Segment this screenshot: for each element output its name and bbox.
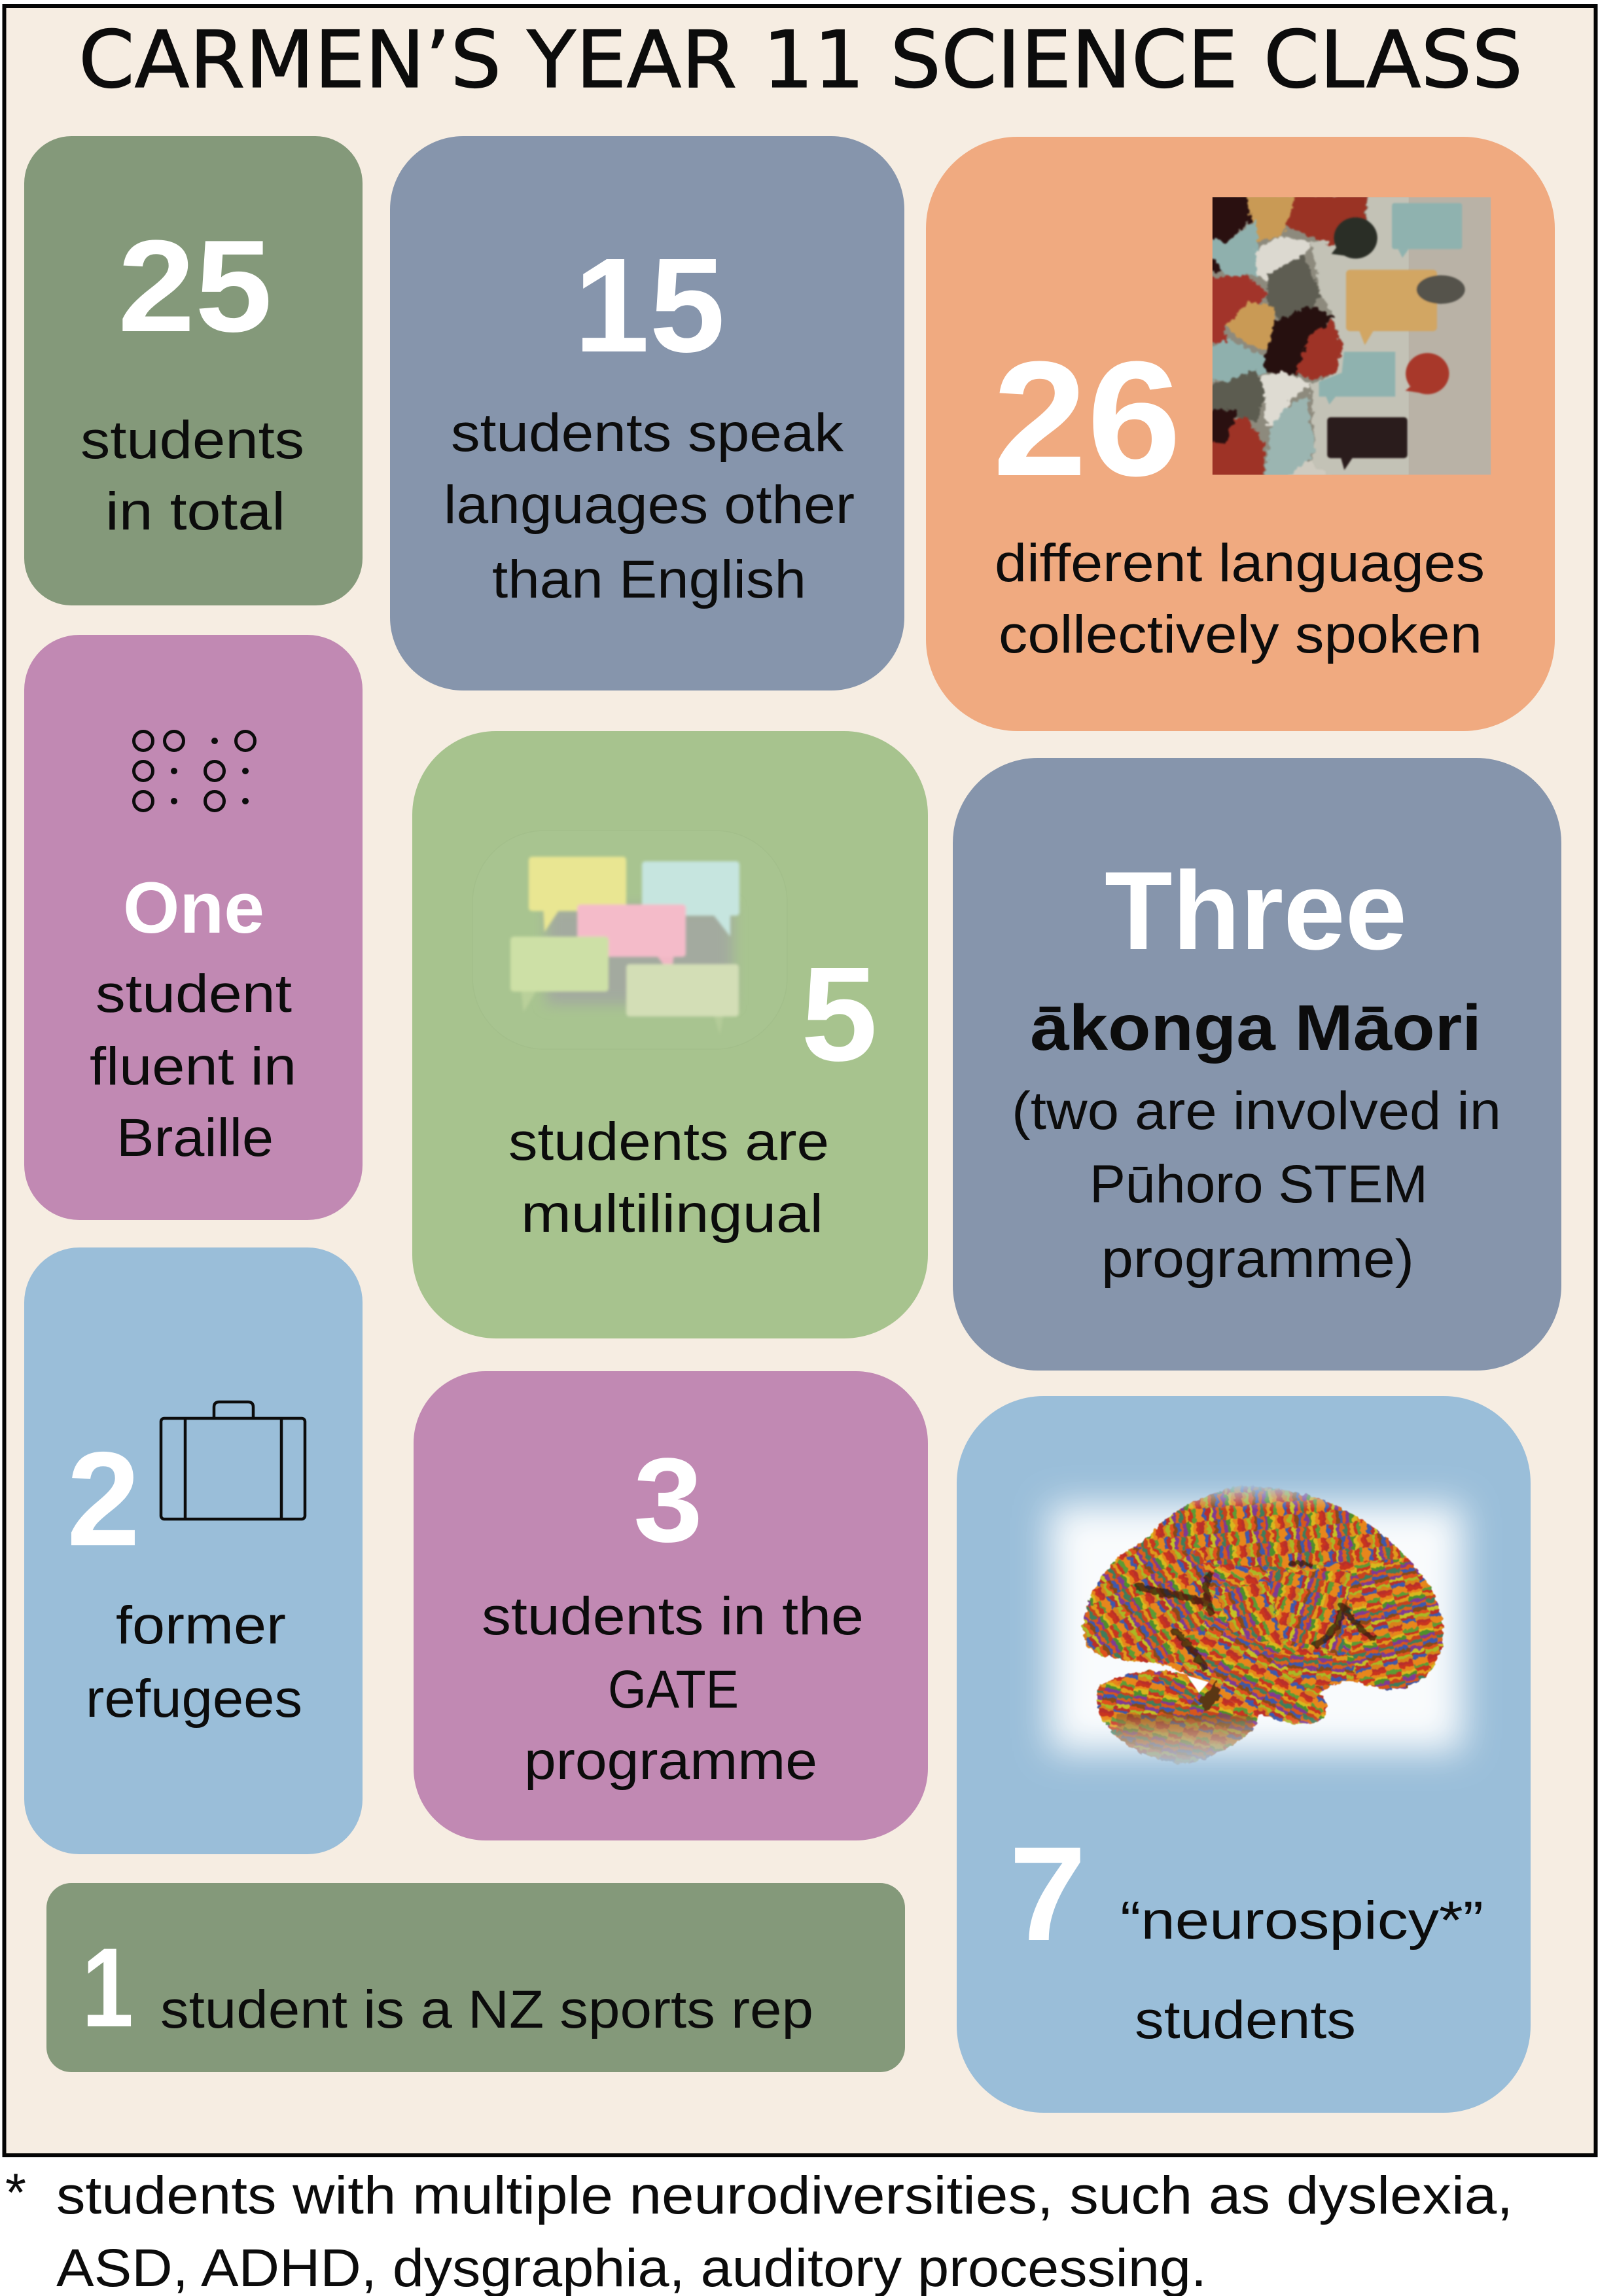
footnote: students with multiple neurodiversities, such as dyslexia, (56, 2166, 1513, 2225)
panel: 5 multilingual students (412, 731, 928, 1338)
panel: 1 student is a NZ sports rep (46, 1883, 905, 2072)
text: different languages collectively spoken: different languages (995, 533, 1485, 593)
text: students are multilingual (508, 1112, 829, 1244)
text: students in the GATE programme: programme (524, 1731, 817, 1791)
text: different languages collectively spoken (995, 533, 1485, 664)
panel: 7 neurospicy students (957, 1396, 1531, 2113)
text: students are multilingual: multilingual (521, 1184, 823, 1244)
footnote (5, 2163, 1513, 2296)
text: students in the GATE programme: students in the (482, 1587, 864, 1646)
number 5: 5 (801, 939, 878, 1089)
number 2: 2 (67, 1424, 140, 1574)
panel: three ākonga Māori (953, 758, 1561, 1371)
panel: 2 former refugees (24, 1247, 363, 1854)
image: overlapping speech bubbles (472, 831, 787, 1049)
panel: 25 students in total (24, 136, 363, 605)
subheading: ākonga Māori: ākonga Māori (1030, 992, 1482, 1064)
text: student is a NZ sports rep: student is a NZ sports rep (160, 1980, 813, 2039)
text: former refugees: refugees (86, 1669, 302, 1729)
footnote: * (5, 2163, 26, 2223)
text: student fluent in Braille (90, 964, 296, 1168)
number 25: 25 (118, 213, 272, 359)
text: student fluent in Braille: Braille (116, 1108, 274, 1168)
number 15: 15 (574, 230, 725, 380)
text: students speak languages other than English: than English (492, 550, 806, 609)
number 7: 7 (1009, 1819, 1086, 1969)
word: Three: Three (1105, 849, 1407, 973)
text: different languages collectively spoken: collectively spoken (999, 605, 1482, 664)
panel: 15 students speak other languages (390, 136, 904, 691)
icon: Braille dots (133, 732, 255, 810)
text: former refugees: former (116, 1596, 286, 1655)
number 1: 1 (82, 1925, 133, 2051)
panel: 26 different languages (926, 137, 1555, 731)
number 26: 26 (993, 327, 1181, 510)
title: CARMEN’S YEAR 11 SCIENCE CLASS (79, 15, 1523, 106)
text: students in total: in total (105, 482, 285, 541)
text: two are involved in Pūhoro STEM programme: Pūhoro STEM (1090, 1155, 1428, 1214)
panel: 3 students in the GATE programme (414, 1371, 928, 1840)
image: multicoloured brain (1050, 1479, 1463, 1769)
text: students speak languages other than English: languages other (444, 475, 855, 535)
text: former refugees (86, 1596, 302, 1729)
number 3: 3 (633, 1433, 703, 1567)
text: students speak languages other than English: students speak (451, 403, 844, 463)
text: students in total: students (80, 410, 304, 470)
text: two are involved in Pūhoro STEM programme: (two are involved in (1012, 1081, 1501, 1141)
word: One: One (123, 868, 264, 948)
text: two are involved in Pūhoro STEM programme: programme) (1101, 1229, 1414, 1289)
text: students in total (80, 410, 304, 541)
text: students in the GATE programme: GATE (608, 1660, 739, 1719)
text: neurospicy students: “neurospicy*” (1120, 1891, 1483, 1950)
text: students in the GATE programme (482, 1587, 864, 1791)
icon: suitcase (161, 1402, 305, 1519)
image: heads and speech bubbles (1208, 194, 1491, 480)
text: student fluent in Braille: student (96, 964, 292, 1024)
text: students speak languages other than English (444, 403, 855, 609)
text: student fluent in Braille: fluent in (90, 1037, 296, 1096)
panel: one student fluent in Braille (24, 635, 363, 1220)
text: neurospicy students: students (1135, 1990, 1356, 2050)
text: two are involved in Pūhoro STEM programme (1012, 1081, 1501, 1289)
text: students are multilingual: students are (508, 1112, 829, 1172)
text: neurospicy students (1120, 1891, 1483, 2050)
